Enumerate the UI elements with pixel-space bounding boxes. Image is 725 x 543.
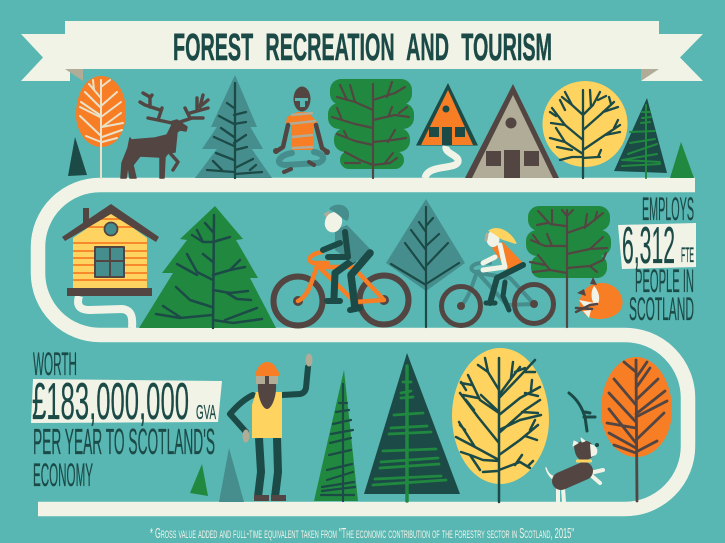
icon: small orange A-frame cabin bbox=[416, 83, 478, 178]
icon: small dark triangle tree bbox=[68, 137, 87, 176]
icon: adult cyclist on orange bike bbox=[274, 205, 408, 326]
icon: yellow round tree bbox=[542, 81, 628, 178]
number box bbox=[618, 223, 696, 269]
icon: teal spruce bbox=[195, 75, 272, 178]
icon: dark triangle tree with green branches bbox=[364, 353, 460, 501]
icon: teal kite tree bbox=[386, 199, 465, 327]
icon: large green spruce bbox=[139, 206, 276, 328]
icon: deer bbox=[121, 93, 208, 178]
rider bbox=[483, 228, 523, 310]
icon: meditating person bbox=[273, 86, 330, 172]
worth callout: WORTH bbox=[33, 346, 77, 382]
employs callout bbox=[618, 191, 696, 327]
infographic canvas: FTE bbox=[681, 244, 694, 267]
icon: dark triangle tree with green branches bbox=[614, 98, 667, 178]
worth callout: £183,000,000 bbox=[32, 373, 189, 431]
icon: large grey A-frame cabin bbox=[465, 84, 559, 178]
worth callout: ECONOMY bbox=[33, 457, 93, 493]
icon: bearded man waving bbox=[230, 354, 312, 501]
worth callout bbox=[31, 346, 222, 493]
icon: small green triangle tree bbox=[670, 142, 694, 178]
icon: yellow cabin bbox=[62, 204, 159, 328]
icon: green spruce triangle bbox=[314, 370, 358, 501]
icon: sleeping fox bbox=[576, 277, 623, 319]
icon: child cyclist on teal bike bbox=[442, 228, 554, 326]
icon: green lobed tree bbox=[328, 79, 414, 178]
bike bbox=[274, 252, 408, 326]
icon: green lobed tree with brown branches bbox=[526, 206, 611, 327]
bike bbox=[442, 263, 554, 326]
icon: small green triangle bbox=[190, 464, 208, 496]
infographic canvas: PER YEAR TO SCOTLAND'S bbox=[33, 421, 215, 462]
icon: dog bbox=[546, 438, 603, 502]
icon: small teal triangle bbox=[219, 448, 244, 502]
icon: orange tree bbox=[76, 76, 126, 178]
value box bbox=[31, 379, 222, 423]
winding road bbox=[38, 185, 695, 509]
icon: large yellow tree bbox=[452, 348, 549, 502]
icon: stick bbox=[569, 393, 595, 431]
icon: orange tree bbox=[601, 357, 672, 501]
title banner bbox=[21, 21, 703, 81]
worth callout: GVA bbox=[196, 402, 216, 424]
rider bbox=[323, 205, 373, 310]
